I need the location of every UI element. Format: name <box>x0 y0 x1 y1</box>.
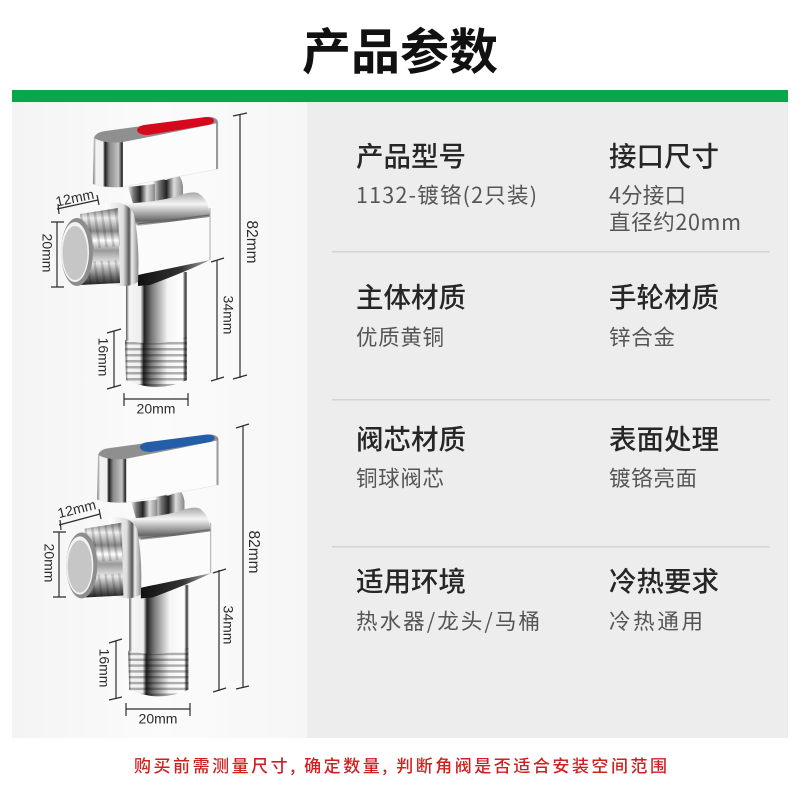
dimensions: blue valve: 20mm <box>139 711 177 727</box>
title: 产品参数 <box>302 13 498 84</box>
spec: environment: 热水器/龙头/马桶 <box>356 605 540 636</box>
spec: connector size: 4分接口 <box>609 179 686 210</box>
green header bar <box>12 90 788 102</box>
dimensions: red valve: 82mm <box>243 220 260 264</box>
panel: product images <box>12 102 307 738</box>
valve with blue handle <box>66 434 218 696</box>
dimensions: blue valve: 20mm <box>41 544 57 582</box>
dimensions: red valve: 20mm <box>39 234 55 272</box>
dimensions: red valve: 34mm <box>220 296 236 334</box>
spec: valve core material: 铜球阀芯 <box>356 462 444 493</box>
spec: hot and cold: 冷热要求 <box>609 559 719 599</box>
spec: environment: 适用环境 <box>356 559 466 599</box>
spec: product model: 产品型号 <box>356 134 466 174</box>
spec: surface treatment: 镀铬亮面 <box>609 462 697 493</box>
dimensions: red valve: 16mm <box>95 338 111 376</box>
spec: product model <box>356 134 537 210</box>
spec: connector size: 直径约20mm <box>609 206 741 237</box>
spec: hot and cold: 冷热通用 <box>609 605 703 636</box>
spec: hot and cold <box>609 559 719 636</box>
spec: valve core material <box>356 417 466 493</box>
spec: connector size <box>609 134 741 237</box>
dimensions: blue valve: 82mm <box>245 530 262 574</box>
spec: body material: 主体材质 <box>356 275 466 315</box>
spec: body material: 优质黄铜 <box>356 321 444 352</box>
footer note: 购买前需测量尺寸, 确定数量, 判断角阀是否适合安装空间范围 <box>134 752 667 777</box>
dimensions: blue valve: 16mm <box>96 649 112 687</box>
spec: environment <box>356 559 540 636</box>
spec: surface treatment: 表面处理 <box>609 417 719 457</box>
panel: specifications <box>307 102 788 738</box>
spec: valve core material: 阀芯材质 <box>356 417 466 457</box>
spec: handle material: 锌合金 <box>609 321 675 352</box>
spec: handle material <box>609 275 719 352</box>
dimensions: blue valve: 12mm <box>56 496 97 521</box>
spec: body material <box>356 275 466 352</box>
dimensions: red valve: 20mm <box>137 401 175 417</box>
dimensions: red valve <box>39 113 260 417</box>
spec: handle material: 手轮材质 <box>609 275 719 315</box>
dimensions: blue valve <box>41 424 262 727</box>
dimensions: red valve: 12mm <box>54 186 95 210</box>
spec: connector size: 接口尺寸 <box>609 134 719 174</box>
spec: product model: 1132-镀铬(2只装) <box>356 179 537 210</box>
dimensions: blue valve: 34mm <box>220 606 236 644</box>
spec: surface treatment <box>609 417 719 493</box>
valve with red handle <box>61 117 218 387</box>
